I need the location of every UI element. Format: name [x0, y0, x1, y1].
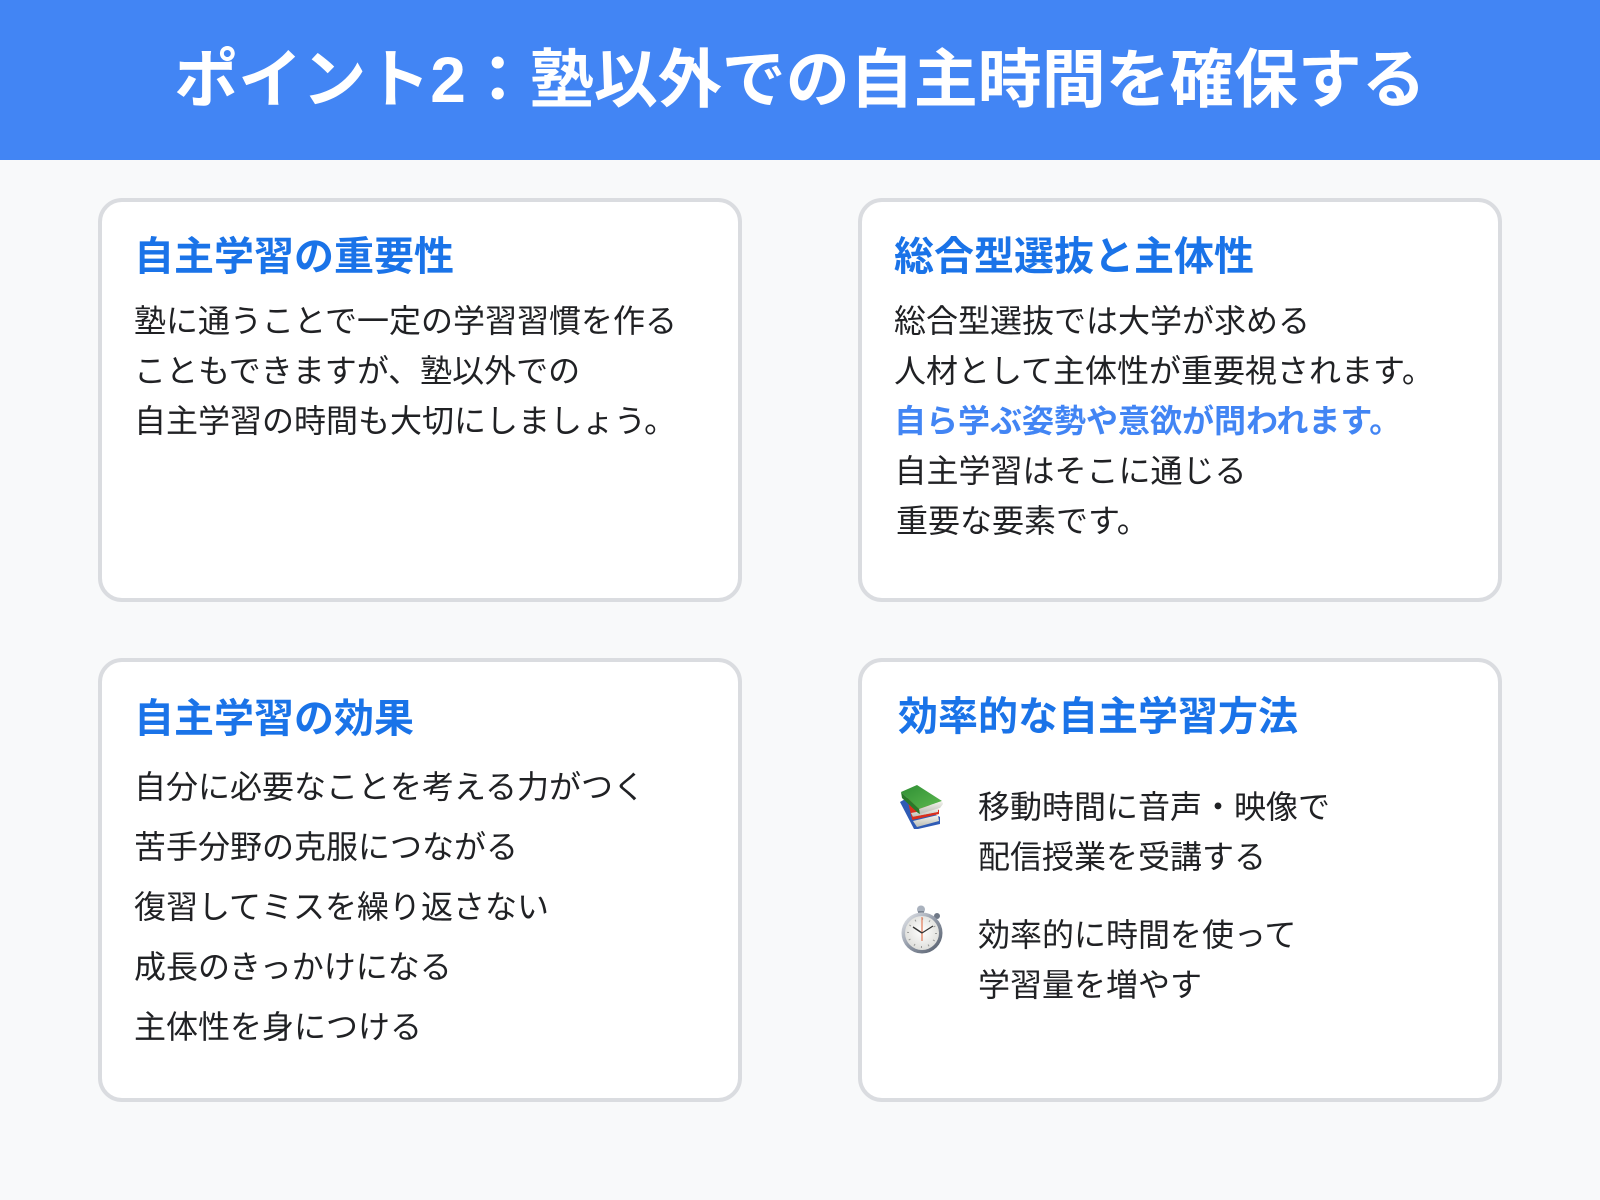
header band — [0, 0, 1600, 160]
heading: importance: 自主学習の重要性 — [134, 235, 454, 279]
list: effects: 自分に必要なことを考える力がつく — [134, 769, 645, 805]
text block: comprehensive selection: 自ら学ぶ姿勢や意欲が問われます。 — [894, 403, 1401, 439]
icon: stopwatch — [902, 906, 942, 954]
list: effects: 主体性を身につける — [134, 1009, 422, 1045]
list: effects: 成長のきっかけになる — [134, 949, 452, 985]
text block: comprehensive selection: 重要な要素です。 — [896, 503, 1149, 539]
text block: comprehensive selection — [894, 303, 1434, 539]
text block: importance: こともできますが、塾以外での — [134, 353, 580, 389]
panel: effects — [98, 658, 742, 1102]
list: effects — [134, 769, 645, 1045]
list: effects: 復習してミスを繰り返さない — [134, 889, 549, 925]
text block: comprehensive selection: 自主学習はそこに通じる — [894, 453, 1247, 489]
text block: importance — [134, 303, 677, 439]
text block: commute study — [978, 789, 1330, 875]
text block: importance: 自主学習の時間も大切にしましょう。 — [134, 403, 676, 439]
text block: importance: 塾に通うことで一定の学習習慣を作る — [134, 303, 677, 339]
text block: efficient use of time — [978, 917, 1296, 1003]
text block: commute study: 配信授業を受講する — [978, 839, 1266, 875]
text block: comprehensive selection: 人材として主体性が重要視されます。 — [894, 353, 1434, 389]
panel: comprehensive selection — [858, 198, 1502, 602]
heading: effects: 自主学習の効果 — [134, 697, 414, 741]
heading: comprehensive selection: 総合型選抜と主体性 — [894, 235, 1254, 279]
panel: importance of self-study — [98, 198, 742, 602]
text block: commute study: 移動時間に音声・映像で — [978, 789, 1330, 825]
heading: efficient methods: 効率的な自主学習方法 — [898, 695, 1298, 739]
text block: efficient use of time: 学習量を増やす — [978, 967, 1202, 1003]
list: effects: 苦手分野の克服につながる — [134, 829, 518, 865]
text block: efficient use of time: 効率的に時間を使って — [978, 917, 1296, 953]
panel: efficient methods — [858, 658, 1502, 1102]
title: ポイント2：塾以外での自主時間を確保する — [174, 44, 1426, 116]
text block: comprehensive selection: 総合型選抜では大学が求める — [894, 303, 1310, 339]
icon: books — [900, 785, 943, 829]
